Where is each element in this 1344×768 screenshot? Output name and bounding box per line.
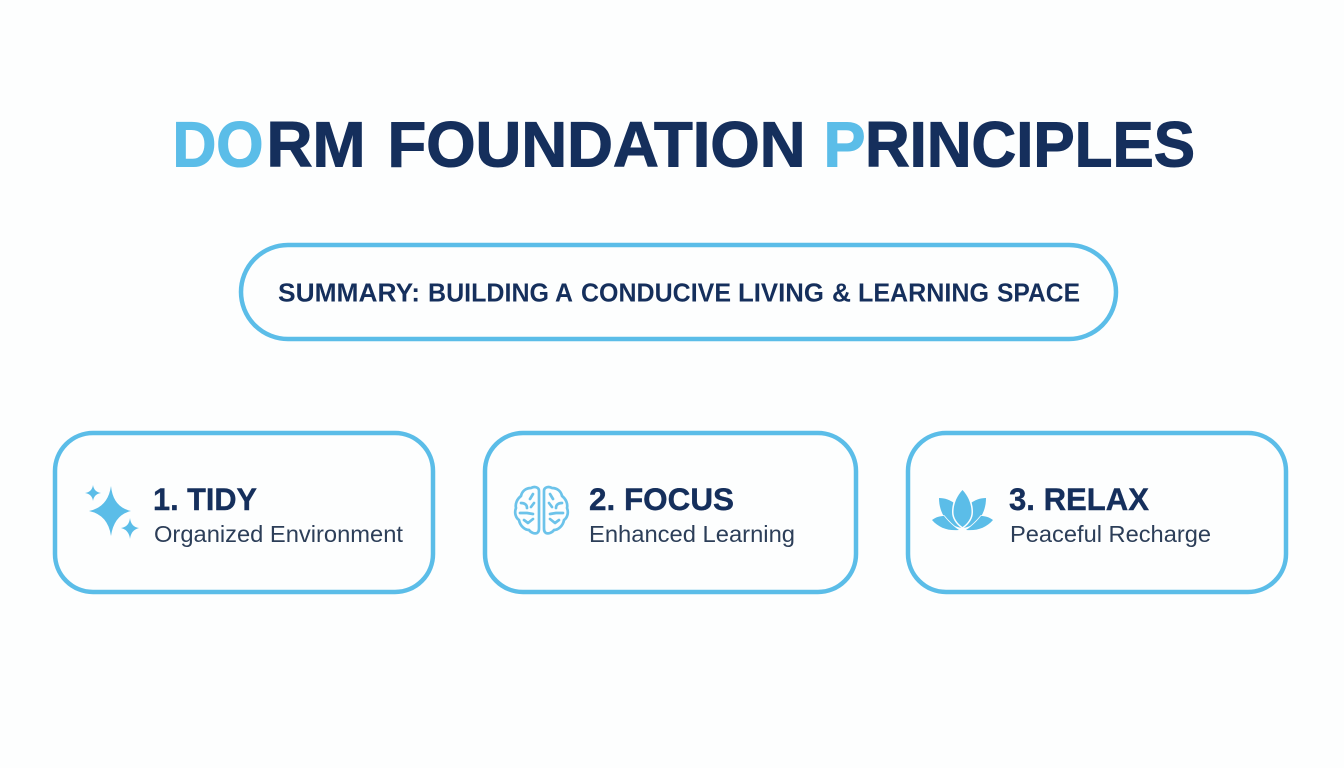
text: enhanced learning: Enhanced Learning <box>589 521 795 547</box>
title: RINCIPLES <box>865 108 1195 180</box>
panel: tidy <box>55 433 433 592</box>
summary text: LEARNING <box>858 280 989 308</box>
panel: focus <box>485 433 856 592</box>
panel: relax <box>908 433 1286 592</box>
title: DO <box>172 108 264 180</box>
title: FOUNDATION <box>388 108 806 180</box>
summary pill <box>241 245 1116 339</box>
title: RM <box>266 108 366 180</box>
text: organized environment: Organized Environment <box>154 521 403 547</box>
summary text: SUMMARY: <box>278 280 420 308</box>
text: peaceful recharge: Peaceful Recharge <box>1010 521 1211 547</box>
summary text: BUILDING <box>428 280 549 308</box>
icon: sparkles <box>85 485 139 539</box>
title: P <box>824 108 866 180</box>
heading: focus: 2. FOCUS <box>589 481 734 517</box>
title <box>172 108 1195 180</box>
summary text: A <box>555 280 573 308</box>
heading: tidy: 1. TIDY <box>153 481 257 517</box>
summary text: CONDUCIVE <box>581 280 731 308</box>
summary text: & <box>832 280 851 308</box>
summary text <box>278 280 1080 308</box>
summary text: SPACE <box>997 280 1080 308</box>
heading: relax: 3. RELAX <box>1009 481 1149 517</box>
icon: lotus <box>932 490 993 530</box>
summary text: LIVING <box>738 280 824 308</box>
icon: brain <box>515 487 568 533</box>
